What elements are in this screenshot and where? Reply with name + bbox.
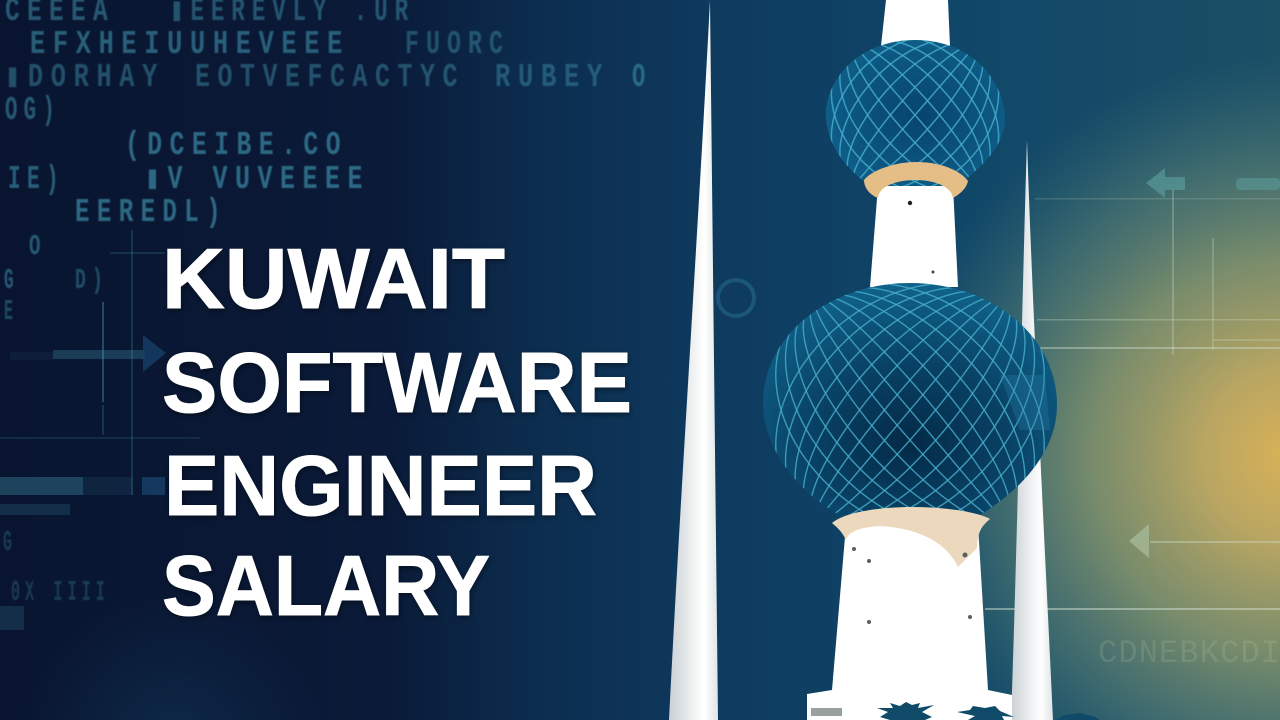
- lower sphere: [763, 283, 1057, 515]
- decorative ring: [718, 280, 754, 316]
- code text backdrop: top left: OG): [5, 92, 61, 129]
- code text backdrop: top left: FUORC: [405, 26, 510, 63]
- code text backdrop: top left: ▮DORHAY: [5, 59, 165, 96]
- code text backdrop: lower left: 0X IIII: [11, 576, 110, 609]
- upper collar: [864, 162, 968, 198]
- title: [162, 232, 632, 634]
- code text backdrop: top left: RUBEY: [495, 59, 610, 96]
- code text backdrop: lower left: [3, 230, 110, 609]
- title: ENGINEER: [164, 439, 597, 534]
- title: SOFTWARE: [162, 336, 632, 431]
- code text backdrop: top left: EOTVEFCACTYC: [195, 59, 465, 96]
- title: SALARY: [162, 539, 490, 634]
- code text backdrop: top left: IE): [8, 161, 65, 198]
- schematic lines and arrows: right: [985, 168, 1280, 610]
- schematic lines and arrow: left: [0, 230, 200, 630]
- code text backdrop: top left: EFXHEIUUHEVEEE: [30, 26, 350, 63]
- title: KUWAIT: [162, 232, 505, 327]
- code text backdrop: top left: ▮V VUVEEEE: [145, 161, 370, 198]
- lower shaft and base: [807, 525, 1012, 720]
- palm silhouettes: [877, 702, 1100, 720]
- window dots: [852, 201, 972, 624]
- code text backdrop: lower left: G: [3, 526, 17, 559]
- code text backdrop: top left: EEREDL): [75, 194, 228, 231]
- upper sphere: [826, 40, 1005, 186]
- code text backdrop: top left: (DCEIBE.CO: [125, 127, 348, 164]
- neck between spheres: [870, 186, 958, 287]
- code text backdrop: lower left: E: [4, 295, 18, 328]
- code text backdrop: top left: [5, 0, 652, 231]
- left spire: [669, 0, 718, 720]
- code text backdrop: lower left: D): [75, 264, 109, 297]
- faint code text: bottom right: CDNEBKCDI: [1098, 635, 1280, 672]
- base plate: [811, 708, 842, 716]
- tower: [763, 0, 1057, 720]
- code text backdrop: top left: O: [632, 59, 652, 96]
- tower top shaft: [881, 0, 950, 46]
- code text backdrop: lower left: G: [4, 264, 19, 297]
- right spire: [1011, 140, 1053, 720]
- code text backdrop: lower left: O: [29, 230, 47, 263]
- lower collar: [832, 507, 990, 567]
